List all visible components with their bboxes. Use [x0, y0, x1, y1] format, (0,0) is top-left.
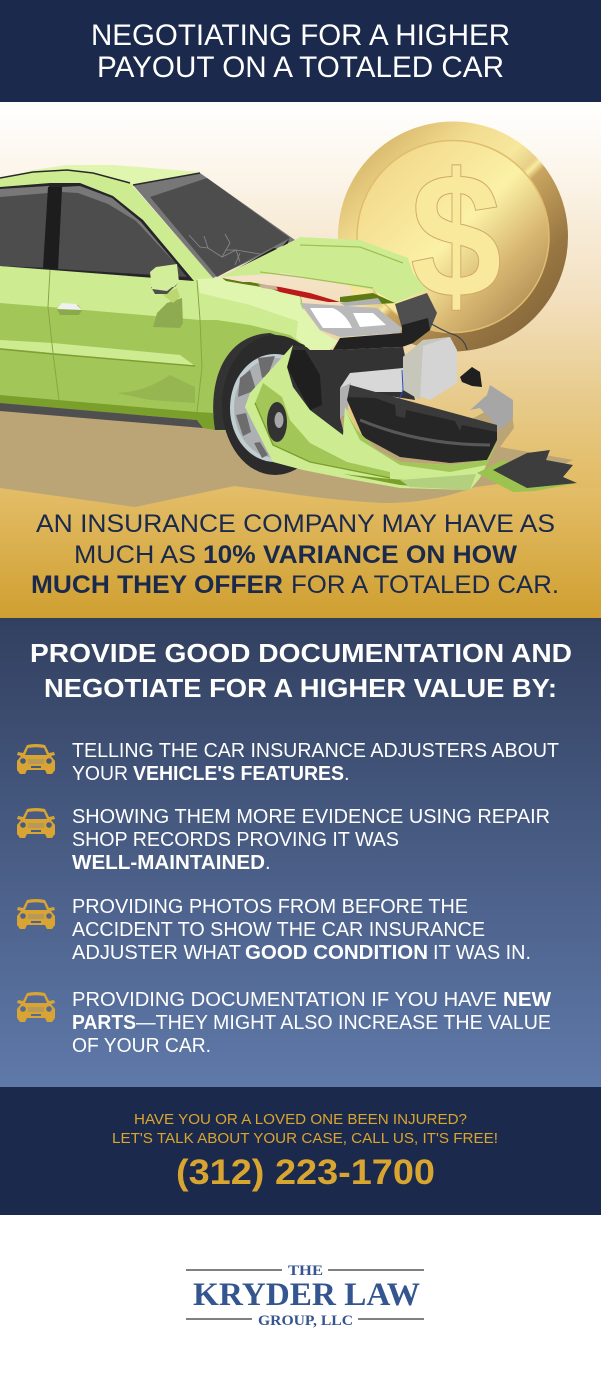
illustration: wrecked green car — [0, 165, 577, 492]
dark engine bay — [287, 293, 437, 437]
icon: car — [17, 808, 55, 838]
side mirror — [150, 264, 183, 328]
tip text: ADJUSTER WHAT — [72, 942, 241, 964]
tip text: SHOP RECORDS PROVING IT WAS — [72, 829, 399, 851]
fender highlight — [197, 278, 300, 322]
panel heading: PROVIDE GOOD DOCUMENTATION AND — [30, 638, 572, 668]
icon: car — [17, 899, 55, 929]
call to action text: HAVE YOU OR A LOVED ONE BEEN INJURED? — [134, 1111, 467, 1128]
icon: gold dollar coin: $ — [410, 136, 502, 335]
tip 3: photos — [17, 896, 531, 964]
text block: variance statement — [32, 514, 557, 593]
text block: variance statement: FOR A TOTALED CAR. — [291, 571, 559, 599]
call to action text: LET'S TALK ABOUT YOUR CASE, CALL US, IT'S FREE! — [112, 1130, 498, 1147]
tip text: IT WAS IN. — [433, 942, 531, 964]
bumper mid-tone panel — [255, 383, 390, 478]
front wheel — [222, 335, 303, 475]
logo: The Kryder Law Group — [186, 1263, 424, 1329]
car roof highlight — [22, 165, 200, 186]
door dent — [117, 375, 195, 403]
ground shadow — [0, 395, 573, 507]
black mirror shard — [460, 367, 482, 387]
door handle — [57, 303, 82, 315]
tip text: GOOD CONDITION — [245, 942, 428, 964]
tip text — [72, 740, 559, 785]
panel: call to action — [0, 1087, 601, 1215]
tip text: NEW — [503, 989, 551, 1011]
tip text — [72, 989, 551, 1057]
tip text: SHOWING THEM MORE EVIDENCE USING REPAIR — [72, 806, 550, 828]
title: PAYOUT ON A TOTALED CAR — [97, 51, 504, 84]
detached green bumper — [245, 345, 497, 490]
tip text: ACCIDENT TO SHOW THE CAR INSURANCE — [72, 919, 485, 941]
tip text: PARTS — [72, 1012, 136, 1034]
panel heading — [30, 638, 572, 703]
road debris — [477, 450, 577, 492]
door crease — [0, 340, 195, 366]
panel: documentation tips — [0, 618, 601, 1088]
logo: The Kryder Law Group: KRYDER LAW — [193, 1277, 420, 1313]
tip text: . — [265, 852, 271, 874]
logo: The Kryder Law Group: THE — [288, 1263, 323, 1279]
tip text: VEHICLE'S FEATURES — [133, 763, 344, 785]
roof line — [0, 170, 130, 183]
panel: hero illustration — [0, 102, 601, 618]
icon: gold dollar coin — [338, 122, 568, 352]
text block: variance statement: 10% VARIANCE ON HOW — [203, 541, 517, 569]
tip text: WELL-MAINTAINED — [72, 852, 265, 874]
tip 1: vehicle features — [17, 740, 559, 785]
red trim stripe — [272, 286, 340, 302]
wheel arch — [213, 333, 305, 430]
tip text: PROVIDING DOCUMENTATION IF YOU HAVE — [72, 989, 497, 1011]
silver bracket — [470, 385, 513, 430]
tip text — [72, 806, 550, 874]
upper body light panels — [0, 170, 310, 350]
side windows — [0, 183, 194, 281]
radiator and engine parts — [340, 337, 457, 418]
icon: car — [17, 744, 55, 774]
tip text: —THEY MIGHT ALSO INCREASE THE VALUE — [136, 1012, 551, 1034]
tip text: YOUR — [72, 763, 128, 785]
tip text: PROVIDING PHOTOS FROM BEFORE THE — [72, 896, 468, 918]
logo: The Kryder Law Group: GROUP, LLC — [258, 1313, 353, 1329]
fog lamp — [267, 402, 287, 442]
hood underside trim — [222, 278, 395, 304]
tip 2: repair records — [17, 806, 550, 874]
tip text — [72, 896, 531, 964]
headlight — [300, 303, 402, 337]
hood — [220, 237, 427, 306]
panel heading: NEGOTIATE FOR A HIGHER VALUE BY: — [44, 673, 557, 703]
door seams — [48, 270, 202, 412]
tip text: OF YOUR CAR. — [72, 1035, 211, 1057]
cracked windshield — [133, 173, 295, 278]
text block: variance statement: AN INSURANCE COMPANY MAY HAVE AS — [36, 510, 555, 538]
phone number: (312) 223-1700 — [176, 1153, 435, 1192]
wire — [430, 323, 467, 350]
title — [91, 19, 510, 84]
tip text: . — [344, 763, 350, 785]
title: NEGOTIATING FOR A HIGHER — [91, 19, 510, 52]
fender corner below headlight — [296, 305, 338, 350]
car body — [0, 170, 310, 440]
tip text: TELLING THE CAR INSURANCE ADJUSTERS ABOUT — [72, 740, 559, 762]
icon: car — [17, 992, 55, 1022]
text block: variance statement: MUCH THEY OFFER — [31, 571, 283, 599]
tip 4: new parts — [17, 989, 551, 1057]
call to action text — [112, 1111, 498, 1147]
torn black bumper frame — [347, 385, 497, 463]
text block: variance statement: MUCH AS — [74, 541, 196, 569]
side skirt — [0, 395, 215, 430]
header banner — [0, 0, 601, 102]
